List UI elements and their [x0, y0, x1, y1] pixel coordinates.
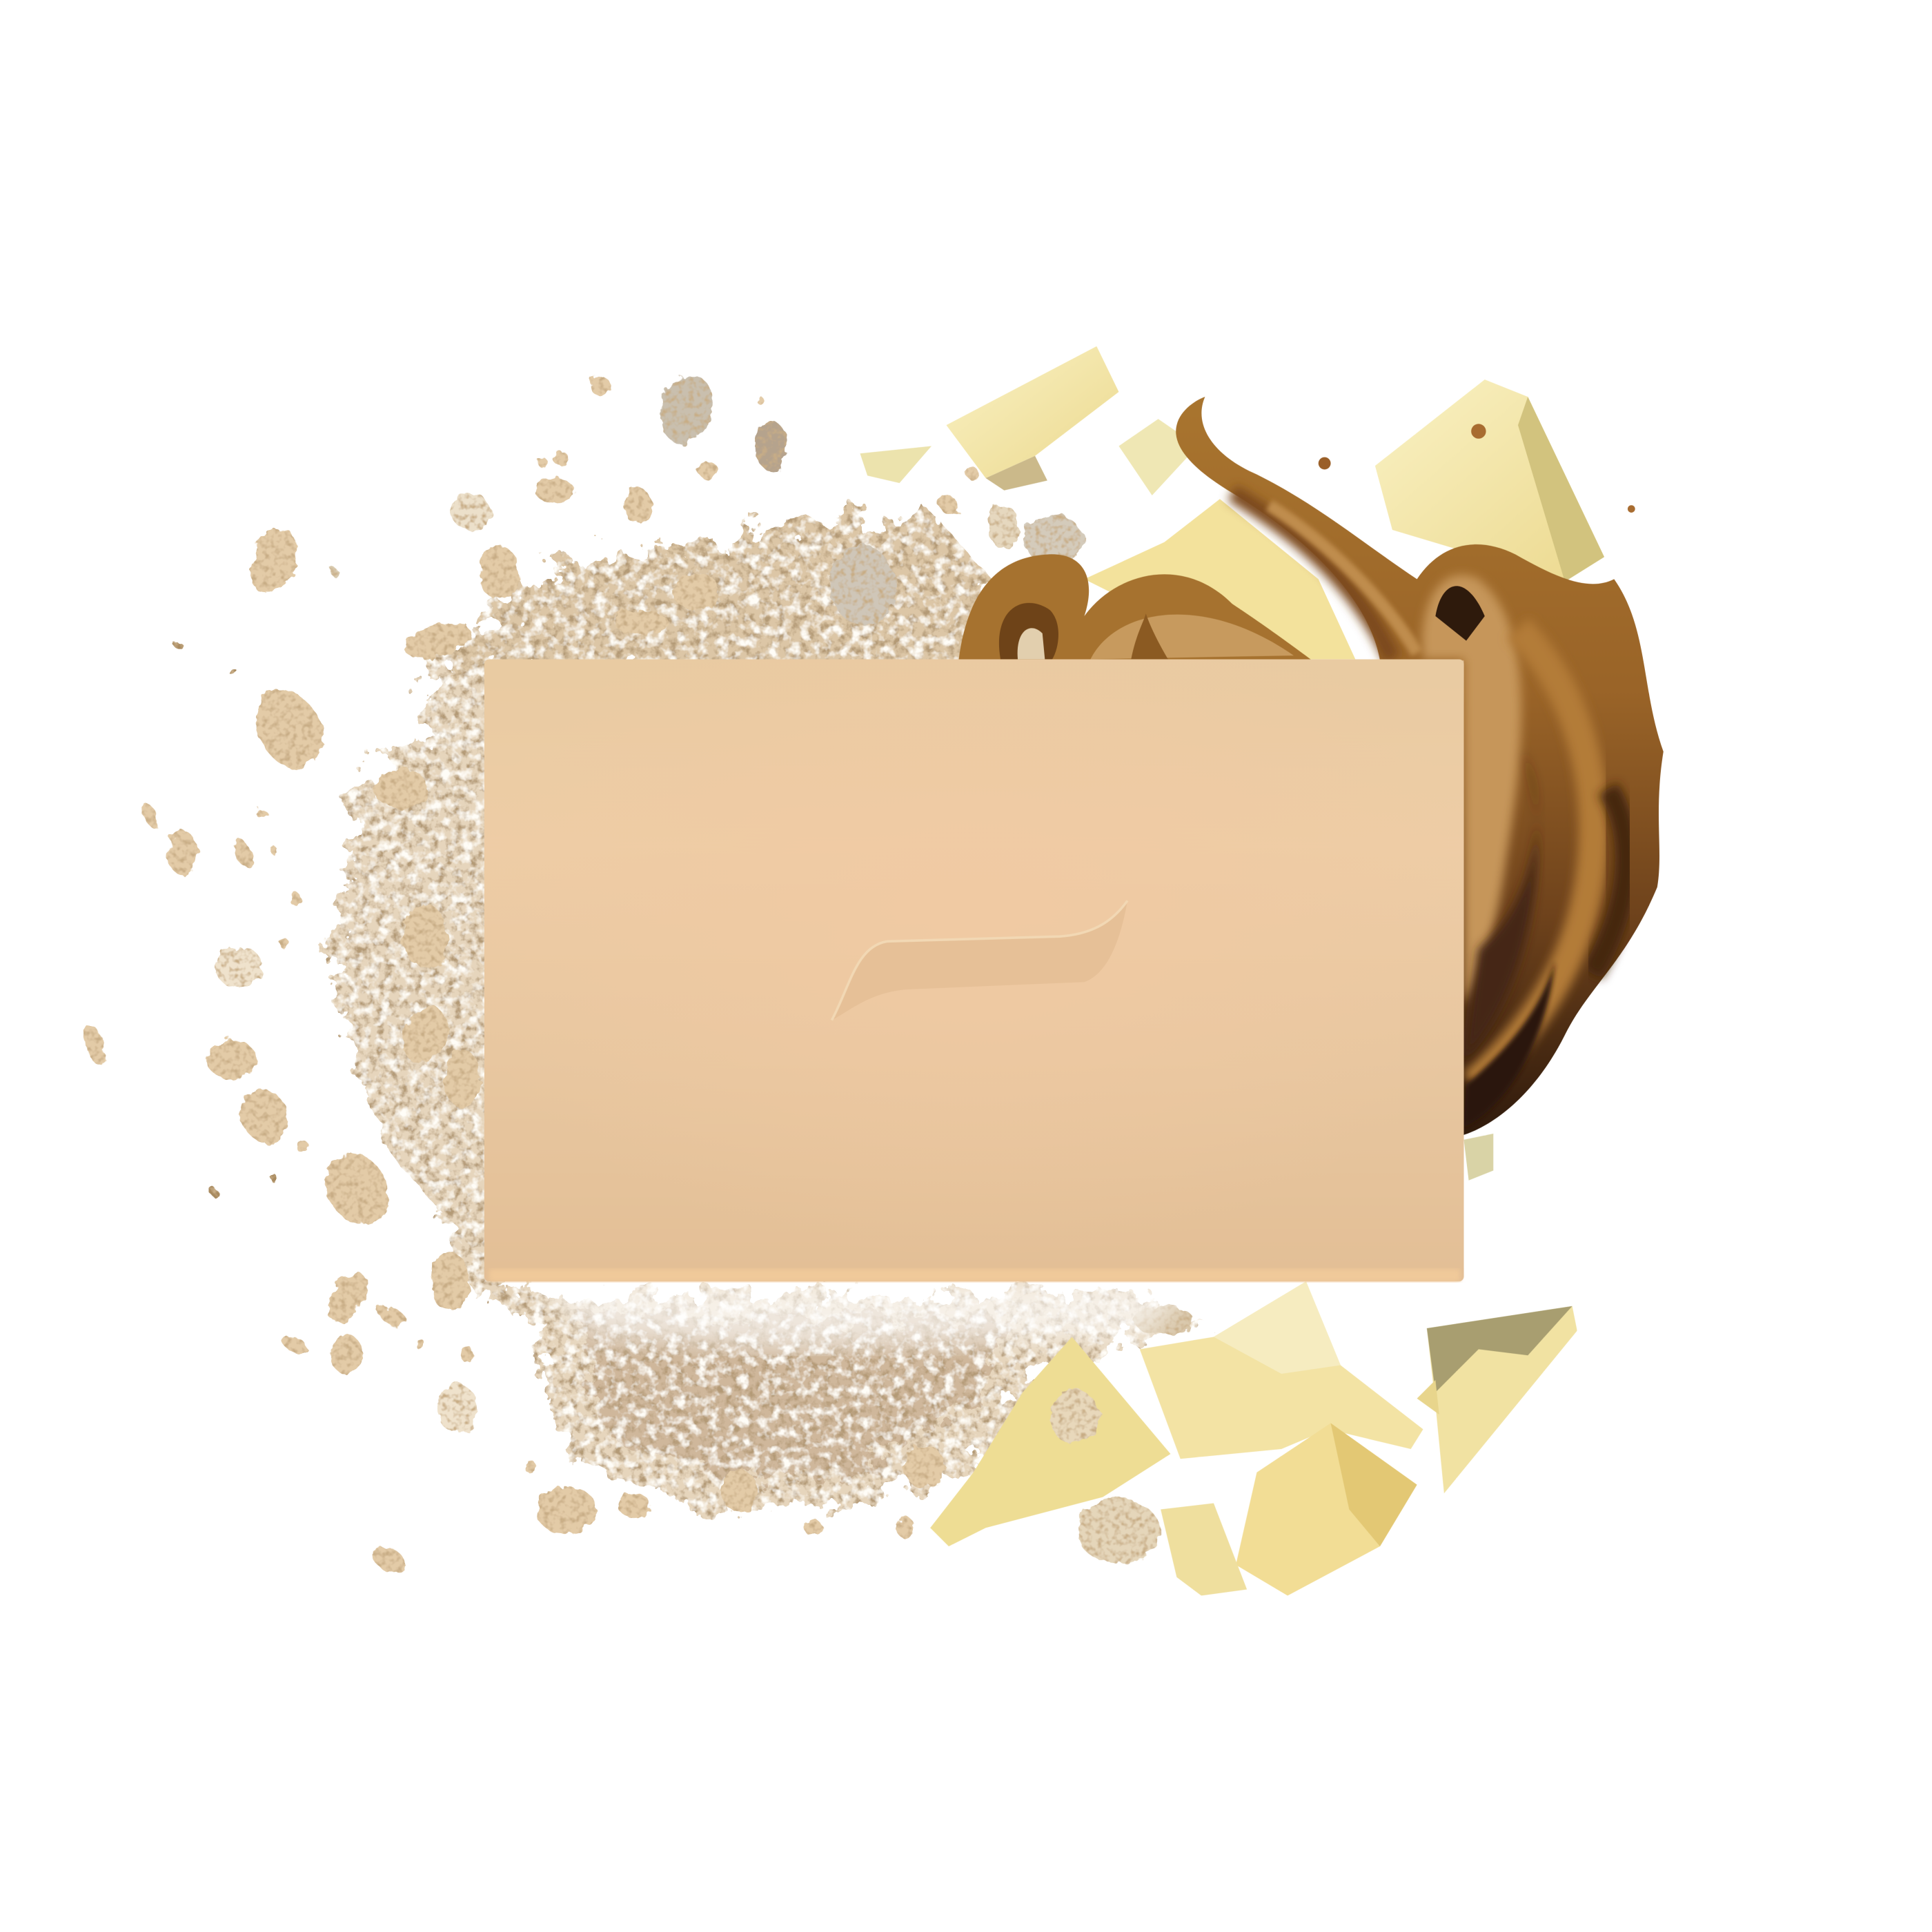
caramel swirl — [958, 397, 1664, 1136]
icon: embossed soap logo — [831, 900, 1127, 1021]
left lumps — [958, 554, 1312, 660]
soap bar — [484, 659, 1463, 1281]
cocoa butter chunks behind swirl — [860, 346, 1604, 1181]
soap shadow on oats — [530, 1281, 1195, 1349]
oat flakes scattered — [83, 368, 1194, 1577]
cocoa butter chunks bottom — [930, 1281, 1577, 1595]
right body — [1176, 397, 1664, 1136]
oat powder pile — [331, 518, 1208, 1510]
